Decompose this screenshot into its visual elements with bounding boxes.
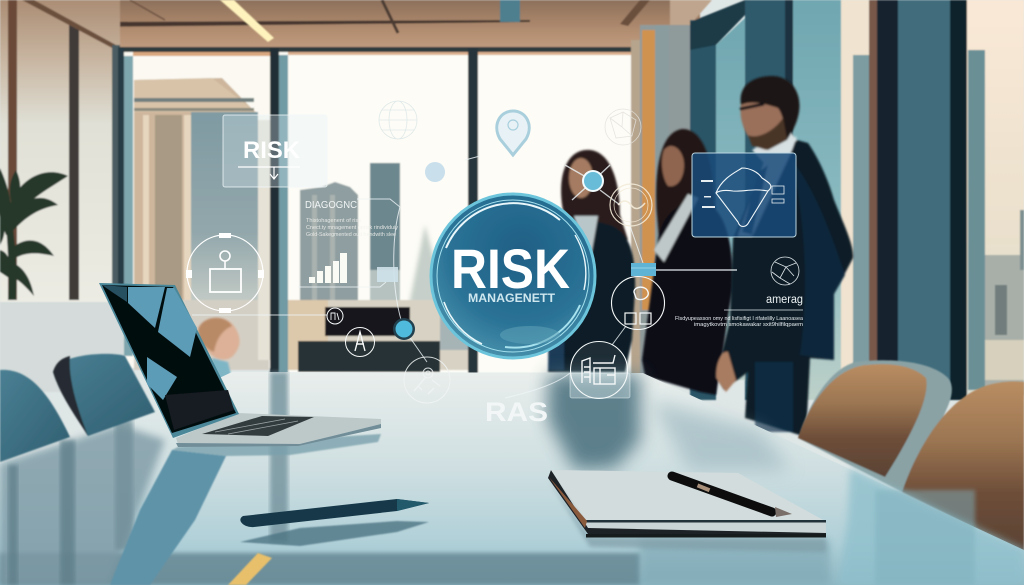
map card captions (701, 180, 784, 208)
icon: pale blue tag (377, 267, 398, 282)
icon: circled emblem (610, 184, 652, 226)
ceiling light strip (220, 0, 274, 42)
right wall columns and windows (640, 0, 967, 400)
small seated person behind laptop (198, 318, 240, 390)
icon: target ring with device (186, 233, 264, 313)
potted plant (0, 168, 68, 300)
icon: faint globe (379, 101, 417, 139)
icon: map location pin (497, 111, 529, 155)
chair back one (798, 360, 952, 492)
icon: risk map shape (716, 168, 771, 226)
RISK card heading: RISK (243, 137, 301, 164)
laptop (99, 283, 381, 447)
small caption text: imagytkovtm smokawakar sxit9hilfilqpaem (694, 322, 803, 328)
icon: blue data tag (631, 263, 656, 276)
icon: polygon globe (771, 257, 799, 285)
left teal chairs (0, 354, 155, 462)
chair back near edge (0, 370, 70, 462)
notebook cover (548, 470, 826, 538)
dark furniture behind table (298, 307, 440, 372)
diagnostic caption text: Gold-Sakegmented oud hendwith slee (306, 232, 396, 238)
centre windows with skyline (278, 48, 633, 373)
icon: circled building (570, 342, 630, 398)
notebook shadow (548, 478, 826, 552)
RAS label: RAS (485, 397, 548, 427)
small caption text: Flsdyupeasson omy nd lisfisifigt I rifatelilly Laanoasea (675, 316, 803, 322)
left window with building (120, 48, 275, 370)
table reflections and shading (0, 372, 1024, 585)
panel: diagnostic chart (305, 200, 399, 283)
diagnostic caption text: Thistohagenent of risk (306, 218, 362, 224)
window mullions (118, 40, 641, 378)
subheading: MANAGENETT (468, 293, 555, 305)
diagnostic caption text (306, 218, 399, 238)
icon: blue connector node (393, 318, 415, 340)
diagnostic caption text: Cnect.ty mnagement oprisk rindividuiy (306, 225, 399, 231)
icon: light blue node near woman (582, 170, 604, 192)
table surface (0, 372, 1024, 585)
notebook with pen (548, 470, 826, 552)
RISK heading: RISK (451, 237, 570, 300)
icon: faint network globe (605, 109, 641, 145)
left glass partition (0, 0, 120, 310)
background: office interior and windows (0, 0, 1024, 400)
diagnostic heading: DIAGOGNC (305, 200, 357, 211)
low white partition (0, 302, 124, 392)
tan chairs on the right (798, 360, 1024, 552)
panel: RISK label card (223, 115, 327, 187)
small caption text (675, 316, 803, 328)
laptop reflection on table (110, 434, 381, 585)
right window with tower and city (967, 0, 1024, 400)
bar chart (309, 253, 347, 283)
three standing business people (548, 76, 853, 437)
icon: pale blue dot (425, 162, 445, 182)
central RISK MANAGEMENT badge (431, 194, 595, 358)
rule above small text (724, 309, 803, 311)
amerag caption: amerag (766, 294, 803, 306)
icon: small down arrow (238, 167, 300, 179)
woman on the left (548, 150, 635, 372)
laptop screen (99, 283, 239, 438)
pen on table (240, 499, 429, 546)
icon: small circled chart (327, 308, 343, 324)
icon: circled keys (404, 357, 450, 403)
icon: circled compass (346, 328, 374, 356)
woman in the middle (642, 129, 732, 395)
panel: blue map card (692, 153, 796, 237)
ceiling (0, 0, 700, 60)
icon: circled brain and screens (612, 276, 664, 330)
man on the right (716, 76, 853, 437)
second chair back (53, 354, 155, 436)
laptop base and keyboard (176, 413, 381, 447)
pen on notebook (672, 476, 792, 517)
connector lines (192, 156, 737, 398)
chair back two (902, 381, 1024, 552)
holographic overlay (186, 101, 803, 427)
